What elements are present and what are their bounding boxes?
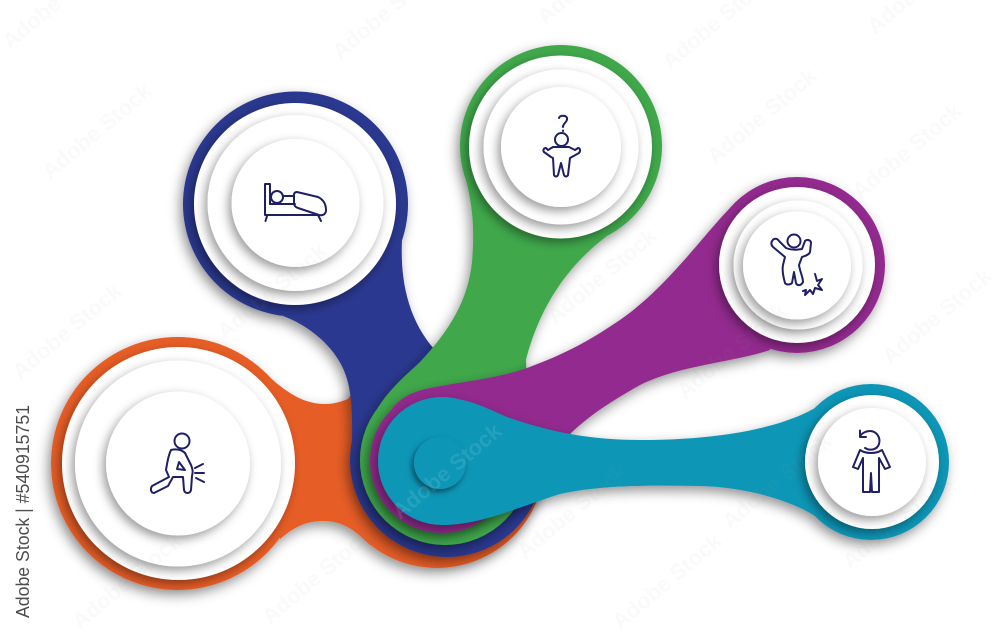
green discs [469, 56, 652, 238]
watermark text: Adobe Stock [702, 63, 822, 169]
icon: person in bed [265, 184, 326, 221]
watermark text: Adobe Stock [67, 528, 187, 634]
watermark text: Adobe Stock [387, 418, 507, 524]
watermark text: Adobe Stock [212, 238, 332, 344]
watermark text: Adobe Stock [847, 98, 967, 204]
navy discs [194, 103, 396, 305]
watermark text: Adobe Stock [7, 278, 127, 384]
orange discs [62, 347, 295, 580]
watermark text: Adobe Stock [877, 263, 997, 369]
hub button [414, 437, 466, 489]
stock id label: Adobe Stock | #540915751 [13, 405, 33, 618]
watermark text: Adobe Stock [717, 428, 837, 534]
watermark text: Adobe Stock [542, 223, 662, 329]
watermark text: Adobe Stock [257, 523, 377, 629]
watermark text: Adobe Stock [837, 468, 957, 574]
panel: purple petal [370, 177, 885, 533]
icon: foot injury [771, 234, 822, 295]
cyan discs [805, 395, 939, 529]
panel: cyan petal [378, 384, 949, 540]
icon: knee pain [151, 434, 204, 493]
watermark text: Adobe Stock [607, 528, 727, 634]
icon: person with rotation arrow [853, 430, 890, 492]
watermark text: Adobe Stock [512, 458, 632, 564]
icon: confused person [543, 116, 580, 176]
watermark text: Adobe Stock [672, 298, 792, 404]
panel: green petal [360, 45, 662, 545]
purple discs [719, 187, 875, 343]
panel: navy petal [183, 92, 544, 557]
panel: orange petal [51, 337, 545, 590]
watermark text: Adobe Stock [37, 78, 157, 184]
